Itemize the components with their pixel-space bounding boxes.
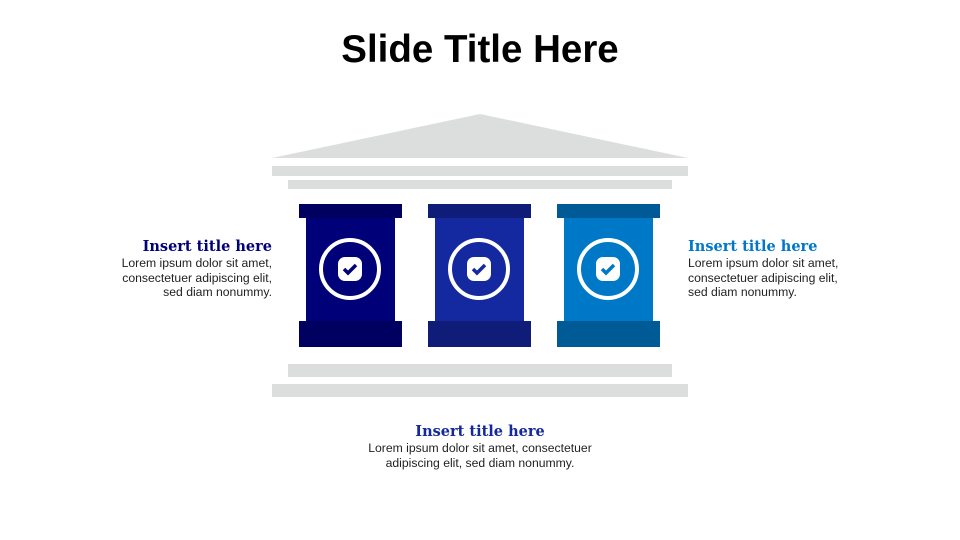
text block bottom: Insert title here — [415, 423, 545, 440]
text block right: sed diam nonummy. — [688, 285, 797, 299]
top bar 1 — [272, 166, 688, 176]
column 2 — [428, 204, 531, 347]
icon: check 2 — [448, 238, 510, 300]
text block left — [122, 238, 272, 299]
text block bottom: Lorem ipsum dolor sit amet, consectetuer — [368, 441, 592, 455]
top bar 2 — [288, 180, 672, 189]
text block left: Insert title here — [143, 238, 272, 255]
text block right — [688, 238, 838, 299]
column 3 — [557, 204, 660, 347]
text block left: sed diam nonummy. — [163, 285, 272, 299]
icon: check 1 — [319, 238, 381, 300]
text block right: consectetuer adipiscing elit, — [688, 270, 838, 284]
pediment — [272, 114, 688, 158]
title: Slide Title Here — [341, 28, 619, 71]
text block bottom — [368, 423, 592, 470]
text block left: consectetuer adipiscing elit, — [122, 270, 272, 284]
text block left: Lorem ipsum dolor sit amet, — [122, 256, 272, 270]
text block right: Insert title here — [688, 238, 817, 255]
text block right: Lorem ipsum dolor sit amet, — [688, 256, 838, 270]
base bar 2 — [272, 384, 688, 397]
icon: check 3 — [577, 238, 639, 300]
text block bottom: adipiscing elit, sed diam nonummy. — [386, 456, 574, 470]
base bar 1 — [288, 364, 672, 377]
column 1 — [299, 204, 402, 347]
